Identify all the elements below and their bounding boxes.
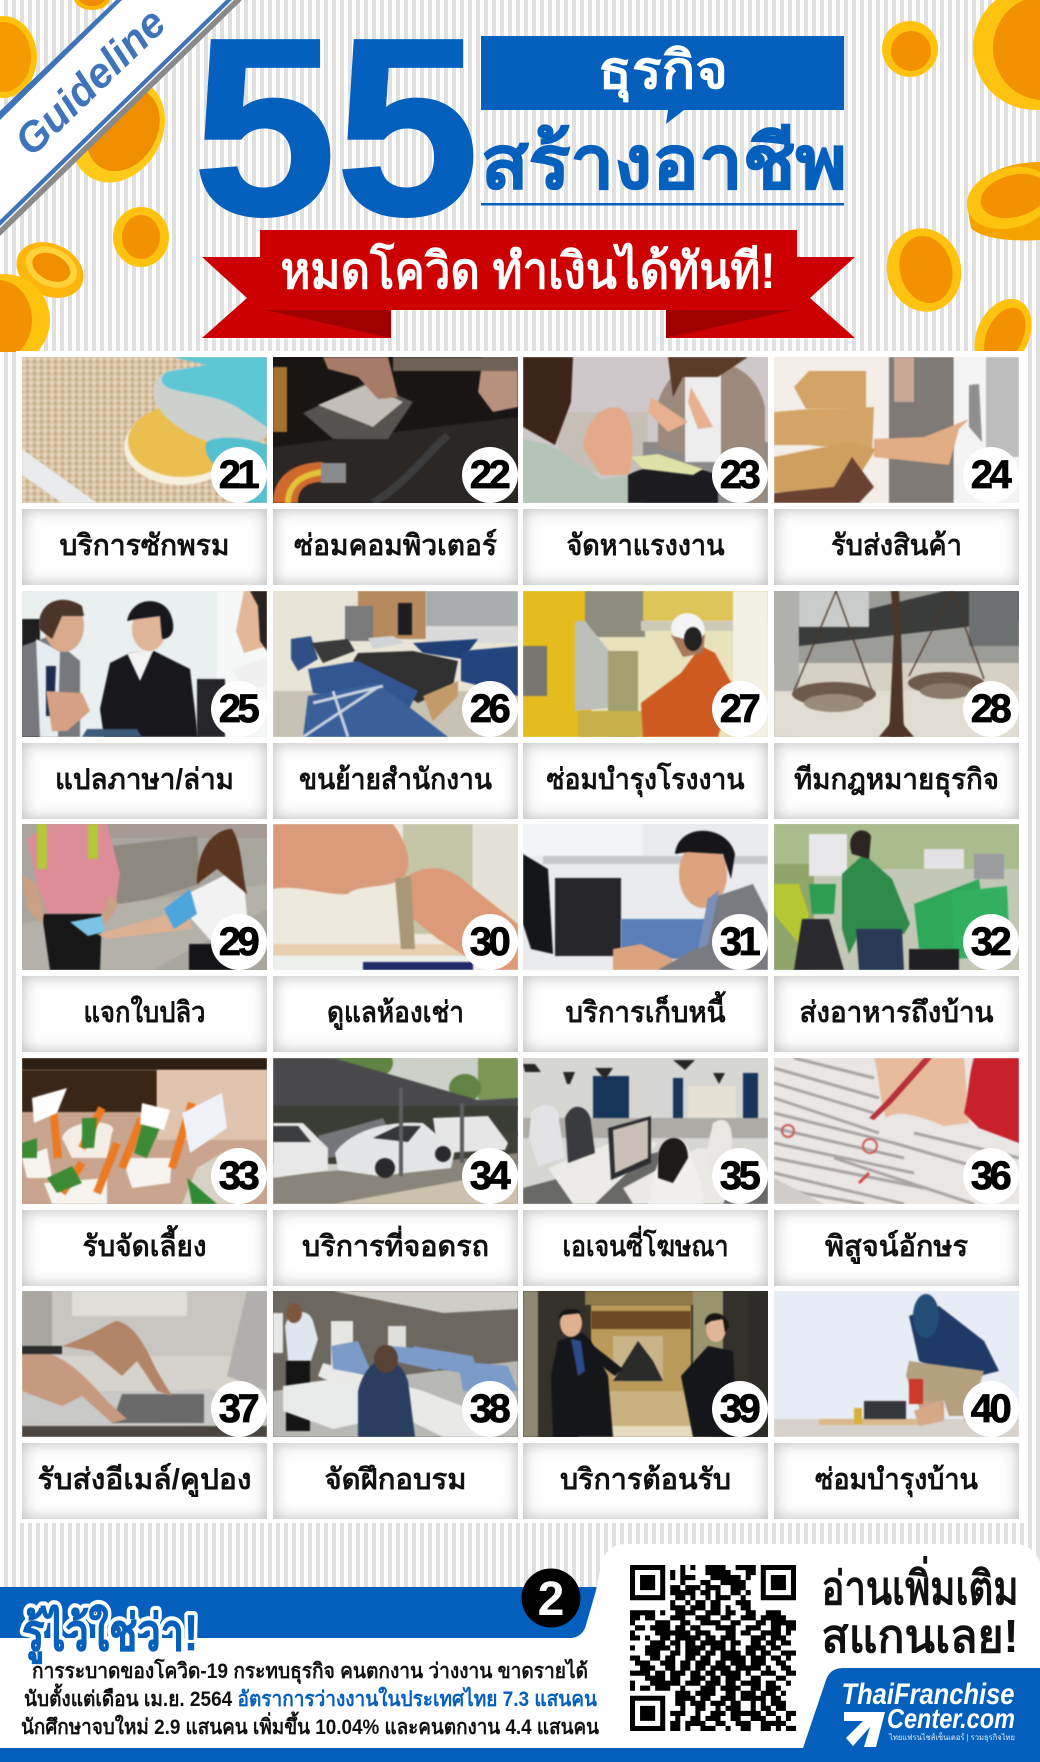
card 27 <box>523 591 768 819</box>
number badge <box>211 1381 267 1437</box>
ThaiFranchise logo: ไทยแฟรนไชส์เซ็นเตอร์ | รวมธุรกิจไทย <box>888 1732 1015 1742</box>
heading: did you know: รู้ไว้ใช่ว่า! <box>22 1604 198 1664</box>
number badge <box>712 681 768 737</box>
card 38 <box>273 1291 518 1519</box>
label <box>774 743 1019 819</box>
number badge <box>462 681 518 737</box>
speech box heading: ธุรกิจ <box>598 42 728 103</box>
number badge: 34 <box>470 1154 507 1198</box>
card 34 <box>273 1058 518 1286</box>
footer section <box>0 1530 1040 1762</box>
number badge <box>462 447 518 503</box>
number badge <box>462 1148 518 1204</box>
speech box heading <box>481 36 844 124</box>
label <box>774 509 1019 585</box>
card 33 <box>22 1058 267 1286</box>
card 31 <box>523 824 768 1052</box>
icon: coin right lower <box>963 290 1040 380</box>
page number badge <box>522 1568 580 1628</box>
number badge <box>211 681 267 737</box>
number badge: 36 <box>971 1154 1008 1198</box>
number badge <box>712 1381 768 1437</box>
QR code <box>630 1565 796 1731</box>
icon: coin top left <box>0 16 37 98</box>
icon: coin right thick <box>960 158 1040 240</box>
number badge <box>963 914 1019 970</box>
subtitle: สร้างอาชีพ <box>481 121 847 204</box>
number badge <box>963 1148 1019 1204</box>
number badge: 26 <box>470 687 507 731</box>
label <box>523 509 768 585</box>
number badge <box>963 1381 1019 1437</box>
label: ซ่อมคอมพิวเตอร์ <box>294 528 497 562</box>
label <box>22 1210 267 1286</box>
label: ซ่อมบำรุงบ้าน <box>815 1464 978 1497</box>
card 22 <box>273 357 518 585</box>
number badge: 25 <box>219 687 256 731</box>
photo: reception staff <box>523 1291 768 1437</box>
panel: services grid <box>16 351 1025 1523</box>
number badge: 38 <box>470 1387 507 1431</box>
scan call to action <box>822 1556 1018 1662</box>
label: จัดหาแรงงาน <box>566 530 725 562</box>
number badge <box>462 914 518 970</box>
photo: carpet cleaning <box>22 357 267 503</box>
label: บริการที่จอดรถ <box>302 1225 489 1263</box>
body text: การระบาดของโควิด-19 กระทบธุรกิจ คนตกงาน ว่างงาน ขาดรายได้ <box>32 1658 588 1685</box>
label <box>273 1210 518 1286</box>
label <box>523 1443 768 1519</box>
ThaiFranchise logo: ThaiFranchise <box>842 1678 1014 1711</box>
photo: training class <box>273 1291 518 1437</box>
number badge: 28 <box>971 687 1008 731</box>
photo: advertising agency <box>523 1058 768 1204</box>
label <box>22 976 267 1052</box>
red ribbon banner <box>202 230 855 338</box>
photo: food delivery rider <box>774 824 1019 970</box>
photo: catering <box>22 1058 267 1204</box>
number badge <box>211 914 267 970</box>
card 21 <box>22 357 267 585</box>
page number badge: 2 <box>538 1573 564 1626</box>
label: รับส่งอีเมล์/คูปอง <box>38 1462 252 1497</box>
number badge: 29 <box>219 920 256 964</box>
number badge <box>963 447 1019 503</box>
number badge: 35 <box>720 1154 757 1198</box>
label <box>22 509 267 585</box>
label <box>523 976 768 1052</box>
label: ซ่อมบำรุงโรงงาน <box>546 761 745 797</box>
photo: keys handover <box>273 824 518 970</box>
label <box>273 976 518 1052</box>
photo: debt collection agent <box>523 824 768 970</box>
card 32 <box>774 824 1019 1052</box>
label <box>774 1443 1019 1519</box>
label <box>273 1443 518 1519</box>
number badge <box>712 914 768 970</box>
card 36 <box>774 1058 1019 1286</box>
number badge <box>712 447 768 503</box>
number badge: 30 <box>470 920 507 964</box>
label: รับส่งสินค้า <box>831 530 962 562</box>
number badge: 37 <box>219 1387 256 1431</box>
label: บริการเก็บหนี้ <box>566 990 726 1029</box>
card 29 <box>22 824 267 1052</box>
ThaiFranchise logo <box>803 1668 1040 1762</box>
number badge: 40 <box>971 1387 1008 1431</box>
card 37 <box>22 1291 267 1519</box>
photo: computer repair <box>273 357 518 503</box>
number badge <box>963 681 1019 737</box>
coins and header artwork <box>0 0 1040 352</box>
photo: factory maintenance <box>523 591 768 737</box>
label <box>774 976 1019 1052</box>
label: บริการซักพรม <box>60 530 230 562</box>
photo: hiring discussion <box>523 357 768 503</box>
label: บริการต้อนรับ <box>560 1464 731 1496</box>
photo: office moving <box>273 591 518 737</box>
number badge: 24 <box>971 453 1008 497</box>
label: เอเจนซี่โฆษณา <box>562 1225 728 1263</box>
label <box>774 1210 1019 1286</box>
photo: legal scales <box>774 591 1019 737</box>
number badge <box>211 1148 267 1204</box>
body text <box>21 1658 600 1739</box>
number badge: 27 <box>720 687 757 731</box>
bottom blue bar <box>0 1748 1040 1762</box>
photo: flyer distribution <box>22 824 267 970</box>
number badge <box>462 1381 518 1437</box>
card 25 <box>22 591 267 819</box>
photo: parking <box>273 1058 518 1204</box>
card 23 <box>523 357 768 585</box>
icon: coin bottom left <box>0 274 50 366</box>
card 35 <box>523 1058 768 1286</box>
guideline corner banner: Guideline <box>5 0 175 164</box>
number badge: 32 <box>971 920 1008 964</box>
label <box>22 743 267 819</box>
label <box>22 1443 267 1519</box>
card 28 <box>774 591 1019 819</box>
number badge: 22 <box>470 453 507 497</box>
label: จัดฝึกอบรม <box>324 1464 466 1496</box>
label <box>273 743 518 819</box>
number badge <box>211 447 267 503</box>
label <box>523 743 768 819</box>
ThaiFranchise logo: Center.com <box>887 1703 1015 1734</box>
body text: นับตั้งแต่เดือน เม.ย. 2564 อัตราการว่างงานในประเทศไทย 7.3 แสนคน <box>24 1683 598 1711</box>
photo: home repair <box>774 1291 1019 1437</box>
label: ส่งอาหารถึงบ้าน <box>800 997 994 1029</box>
number badge: 33 <box>219 1154 256 1198</box>
white lower strip <box>0 1638 1040 1748</box>
icon: coin top small <box>74 0 110 10</box>
label <box>273 509 518 585</box>
label: ดูแลห้องเช่า <box>327 997 464 1030</box>
card 24 <box>774 357 1019 585</box>
label: แปลภาษา/ล่าม <box>55 764 234 796</box>
scan call to action: สแกนเลย! <box>822 1610 1018 1662</box>
card 39 <box>523 1291 768 1519</box>
label: พิสูจน์อักษร <box>825 1229 968 1264</box>
icon: coin right middle <box>877 220 971 320</box>
label: แจกใบปลิว <box>84 995 206 1029</box>
card 26 <box>273 591 518 819</box>
guideline corner banner <box>0 0 242 236</box>
icon: coin small centre left <box>113 207 169 267</box>
card 40 <box>774 1291 1019 1519</box>
number badge <box>712 1148 768 1204</box>
icon: coin top right small <box>882 21 938 77</box>
card 30 <box>273 824 518 1052</box>
number badge: 21 <box>219 453 256 497</box>
photo: parcel delivery <box>774 357 1019 503</box>
photo: typing on laptop <box>22 1291 267 1437</box>
label: รับจัดเลี้ยง <box>82 1224 206 1263</box>
number badge: 23 <box>720 453 757 497</box>
photo: translators <box>22 591 267 737</box>
blue band <box>0 1587 597 1638</box>
photo: proofreading <box>774 1058 1019 1204</box>
red ribbon banner: หมดโควิด ทำเงินได้ทันที! <box>280 241 776 299</box>
label: ทีมกฎหมายธุรกิจ <box>794 764 999 797</box>
icon: coin behind ribbon <box>52 60 184 200</box>
icon: coin lower left <box>7 232 93 308</box>
white QR card <box>586 1544 1040 1748</box>
body text: นักศึกษาจบใหม่ 2.9 แสนคน เพิ่มขึ้น 10.04% และคนตกงาน 4.4 แสนคน <box>21 1711 600 1739</box>
label: ขนย้ายสำนักงาน <box>299 764 492 796</box>
icon: coin top right large <box>973 0 1040 110</box>
number badge: 39 <box>720 1387 757 1431</box>
label <box>523 1210 768 1286</box>
heading: did you know: รู้ไว้ใช่ว่า! <box>22 1604 198 1664</box>
number badge: 31 <box>720 920 757 964</box>
